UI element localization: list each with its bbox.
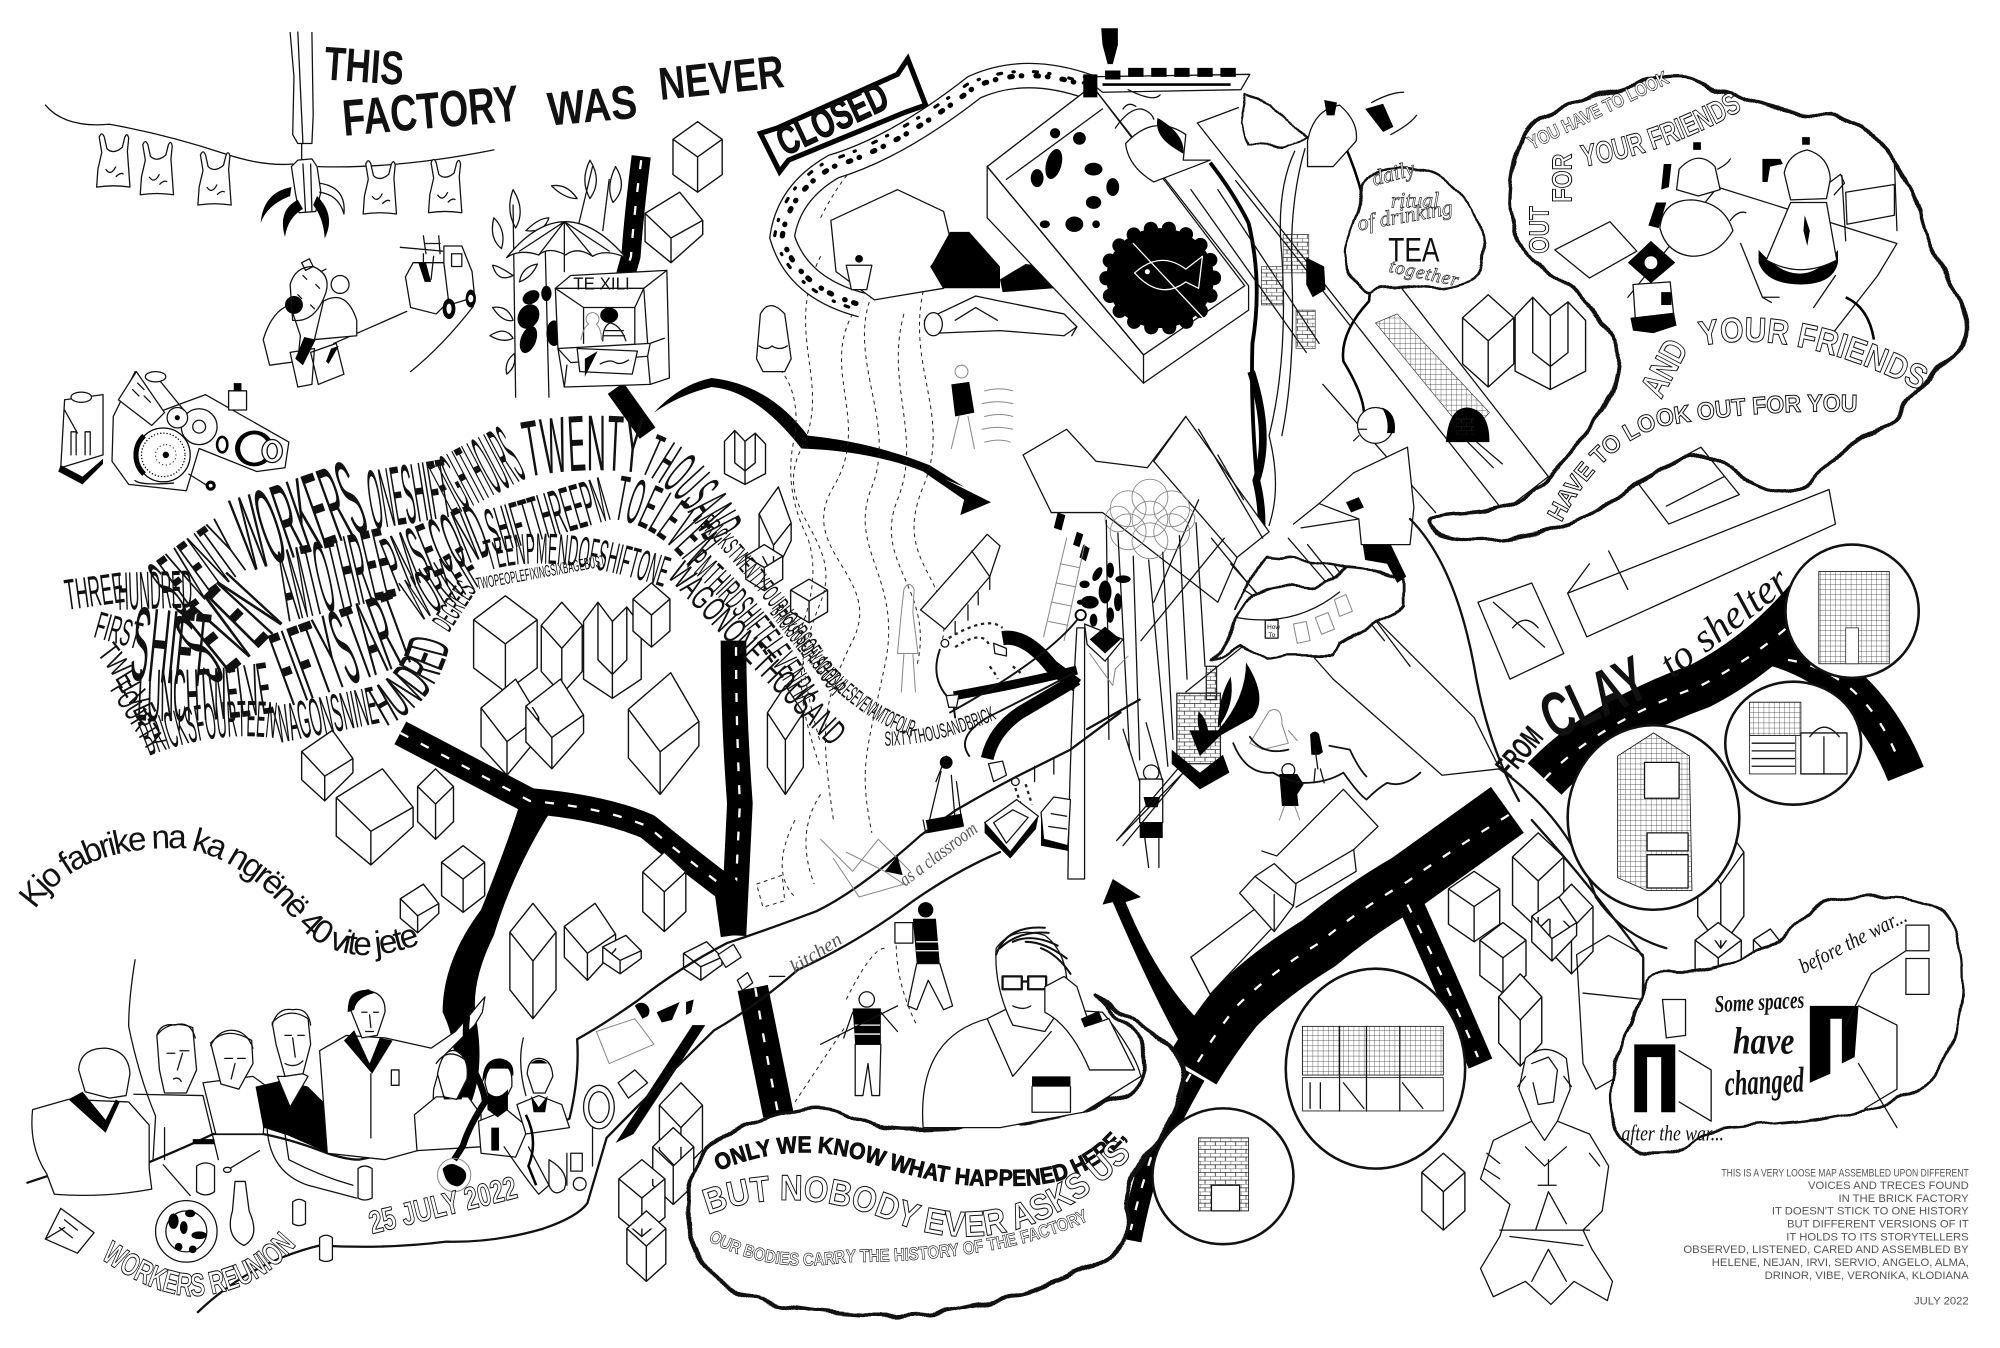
bubble: daily ritual of drinking tea: of drinking xyxy=(1355,195,1454,236)
small cloud by the kettle xyxy=(1241,92,1416,167)
title: FACTORY xyxy=(340,75,521,147)
bubble: some spaces have changed xyxy=(1611,897,1963,1154)
word mass: working hours text xyxy=(64,416,997,756)
credits text block xyxy=(1683,1167,1969,1307)
bubble: some spaces have changed: Some spaces xyxy=(1714,987,1805,1018)
bubble: daily ritual of drinking tea xyxy=(1344,156,1484,291)
conveyor ribbon xyxy=(774,71,1090,310)
te xili stall: TE XILI xyxy=(573,274,630,294)
from clay to shelter heading: FROM xyxy=(1489,720,1550,784)
word mass: working hours text: ONESHIFT xyxy=(367,460,449,529)
kitchen road: kitchen xyxy=(786,929,846,978)
stacked plates and walking figures xyxy=(897,365,1013,692)
word mass: working hours text: TWENTY xyxy=(520,416,644,476)
word mass: working hours text: TEENPMENDOFSHIFTONE xyxy=(482,534,672,587)
credits text block: JULY 2022 xyxy=(1914,1295,1969,1307)
kitchen road xyxy=(27,700,1140,1312)
roads network xyxy=(400,156,1906,1240)
credits text block: HELENE, NEJAN, IRVI, SERVIO, ANGELO, ALMA, xyxy=(1712,1257,1969,1269)
dashed contour lines xyxy=(757,154,944,1102)
albanian caption: Kjo fabrike na ka ngrënë 40 vite jete xyxy=(18,827,418,962)
black bands, hands and sprinklers xyxy=(936,620,1077,859)
clothesline with shirts xyxy=(45,105,494,214)
bubble: daily ritual of drinking tea: ritual xyxy=(1391,189,1439,213)
railway platform with bricks and tunnel xyxy=(1191,108,1548,536)
credits text block: OBSERVED, LISTENED, CARED AND ASSEMBLED BY xyxy=(1683,1244,1969,1256)
word mass: working hours text: EIGHTHOURS xyxy=(428,426,526,516)
word mass: working hours text: SEVENTY xyxy=(148,518,246,615)
workers reunion and date labels: WORKERS REUNION xyxy=(103,1230,296,1297)
houses xyxy=(302,122,1782,1281)
laundry cloud xyxy=(1213,536,1406,660)
word mass: working hours text: AMTOTHREE xyxy=(278,528,396,622)
workers reunion and date labels xyxy=(103,1169,521,1297)
bubble: only we know what happened here: BUT NOBODY EVER ASKS US xyxy=(702,1140,1130,1238)
credits text block: IN THE BRICK FACTORY xyxy=(1838,1193,1969,1205)
bubble: only we know what happened here xyxy=(686,993,1186,1320)
bubble: look out for your friends: YOUR FRIENDS xyxy=(1579,94,1740,166)
bubble: look out for your friends: OUT xyxy=(1522,206,1554,254)
reunion workers at the table xyxy=(32,960,569,1198)
word mass: working hours text: FIRST xyxy=(94,612,144,648)
word mass: working hours text: SEVEN xyxy=(176,572,282,682)
te xili stall xyxy=(555,270,669,387)
high-vis workers xyxy=(821,902,953,1096)
credits text block: DRINOR, VIBE, VERONIKA, KLODIANA xyxy=(1765,1270,1969,1282)
word mass: working hours text: BRICKSONEDAYSCHEDULESEVENAMTOFOUR xyxy=(770,604,916,736)
title xyxy=(323,38,786,147)
workers reunion and date labels: 25 JULY 2022 xyxy=(365,1169,521,1241)
word mass: working hours text: TOELEVEN xyxy=(618,476,722,566)
word mass: working hours text: WORKERS xyxy=(228,462,367,570)
word mass: working hours text: FOURTY xyxy=(110,680,166,748)
word mass: working hours text: FIFTYSTART xyxy=(268,592,411,706)
word mass: working hours text: SHIFT xyxy=(132,607,212,686)
closed sign: CLOSED xyxy=(769,73,895,164)
from clay to shelter heading xyxy=(1489,556,1798,784)
plants and umbrella xyxy=(490,160,626,397)
word mass: working hours text: HUNDRED xyxy=(368,637,448,726)
word mass: working hours text: WAGONONETHOUSAND xyxy=(670,560,844,744)
bubble: daily ritual of drinking tea: daily xyxy=(1369,156,1418,191)
from clay to shelter heading: to shelter xyxy=(1650,556,1798,686)
word mass: working hours text: THOUSAND xyxy=(644,434,741,540)
worker on stepladder xyxy=(923,756,964,833)
bottle, bucket and excavator shapes xyxy=(757,190,1077,372)
forklift and workers with bricks xyxy=(263,236,476,387)
laundry cloud: How xyxy=(1267,624,1280,631)
table settings xyxy=(45,1128,593,1262)
word mass: working hours text: PMTHIRDSHIFTELEVENPM xyxy=(686,548,819,704)
word mass: working hours text: DEGREES xyxy=(432,580,476,632)
portrait: man with glasses xyxy=(923,928,1141,1128)
bubble: daily ritual of drinking tea: together xyxy=(1387,256,1461,291)
word mass: working hours text: SHIFTTHREEPM xyxy=(484,477,611,552)
bubble: look out for your friends: HAVE TO LOOK OUT FOR YOU xyxy=(1546,394,1857,522)
word mass: working hours text: BRICKSTWENTYFOURHOURSOFLABOUR xyxy=(700,514,846,696)
credits text block: VOICES AND TRECES FOUND xyxy=(1808,1180,1969,1192)
bubble: look out for your friends: FOR xyxy=(1545,154,1577,202)
factory platform with fish xyxy=(987,86,1249,383)
word mass: working hours text: PMSECOND xyxy=(378,506,488,592)
bubble: only we know what happened here: ONLY WE KNOW WHAT HAPPENED HERE, xyxy=(714,1131,1128,1186)
lower isometric long blocks xyxy=(1191,789,1378,994)
word mass: working hours text: LUNCHTWELVE xyxy=(138,662,274,722)
bubble: some spaces have changed: changed xyxy=(1724,1059,1806,1104)
bubble: only we know what happened here: OUR BODIES CARRY THE HISTORY OF THE FACTORY xyxy=(710,1208,1086,1266)
flower net water tower xyxy=(1105,479,1205,766)
title: NEVER xyxy=(656,45,786,110)
credits text block: BUT DIFFERENT VERSIONS OF IT xyxy=(1787,1219,1969,1231)
clay idol figure xyxy=(1481,1049,1612,1304)
kitchen road: as a classroom xyxy=(896,818,982,891)
roof block with hanging lines xyxy=(921,534,1000,634)
smoking bald man xyxy=(1293,407,1414,545)
from clay to shelter heading: CLAY xyxy=(1529,642,1658,753)
laundry cloud: To xyxy=(1268,632,1276,639)
black curving arrow xyxy=(654,378,991,515)
word mass: working hours text: WORKFIF xyxy=(398,546,478,620)
long block and sports field xyxy=(1478,447,1835,679)
isometric factory buildings xyxy=(1023,416,1410,692)
word mass: working hours text: SIXTYTHOUSANDBRICKS xyxy=(885,706,997,746)
title: THIS xyxy=(323,38,406,96)
white road edges on the right xyxy=(1410,519,1666,1001)
title: WAS xyxy=(545,76,639,137)
tea jug pouring xyxy=(1115,104,1371,532)
word mass: working hours text: TWELVE xyxy=(100,641,156,720)
bubbles with buildings xyxy=(1152,545,1919,1244)
word mass: working hours text: TWOPEOPLEFIXINGSIXBAGEBUST xyxy=(475,555,604,589)
claw crane xyxy=(261,32,344,238)
bubble: some spaces have changed: before the war... xyxy=(1795,903,1911,978)
bubble: daily ritual of drinking tea: TEA xyxy=(1388,231,1440,269)
bubble: look out for your friends xyxy=(1387,68,1970,581)
engine machine xyxy=(58,372,289,491)
woman with walker and figures near brick tower xyxy=(1233,602,1500,820)
tray and nozzle xyxy=(1083,28,1250,98)
word mass: working hours text: HUNDRED xyxy=(118,570,192,610)
bubble: some spaces have changed: have xyxy=(1733,1020,1794,1062)
bubble: look out for your friends: YOUR FRIENDS xyxy=(1696,317,1928,388)
word mass: working hours text: WAGONSNINE xyxy=(272,686,380,742)
word mass: working hours text: THREE xyxy=(64,572,125,610)
credits text block: IT HOLDS TO ITS STORYTELLERS xyxy=(1786,1231,1969,1243)
bubble: look out for your friends: YOU HAVE TO LOOK xyxy=(1525,68,1672,154)
bubble: look out for your friends: AND xyxy=(1633,333,1696,404)
word mass: working hours text: BRICKSFOURTEEN xyxy=(138,701,277,756)
credits text block: IT DOESN'T STICK TO ONE HISTORY xyxy=(1772,1206,1969,1218)
bubble: some spaces have changed: after the war... xyxy=(1621,1121,1724,1145)
central fountain, ladder, workers xyxy=(1044,538,1259,879)
